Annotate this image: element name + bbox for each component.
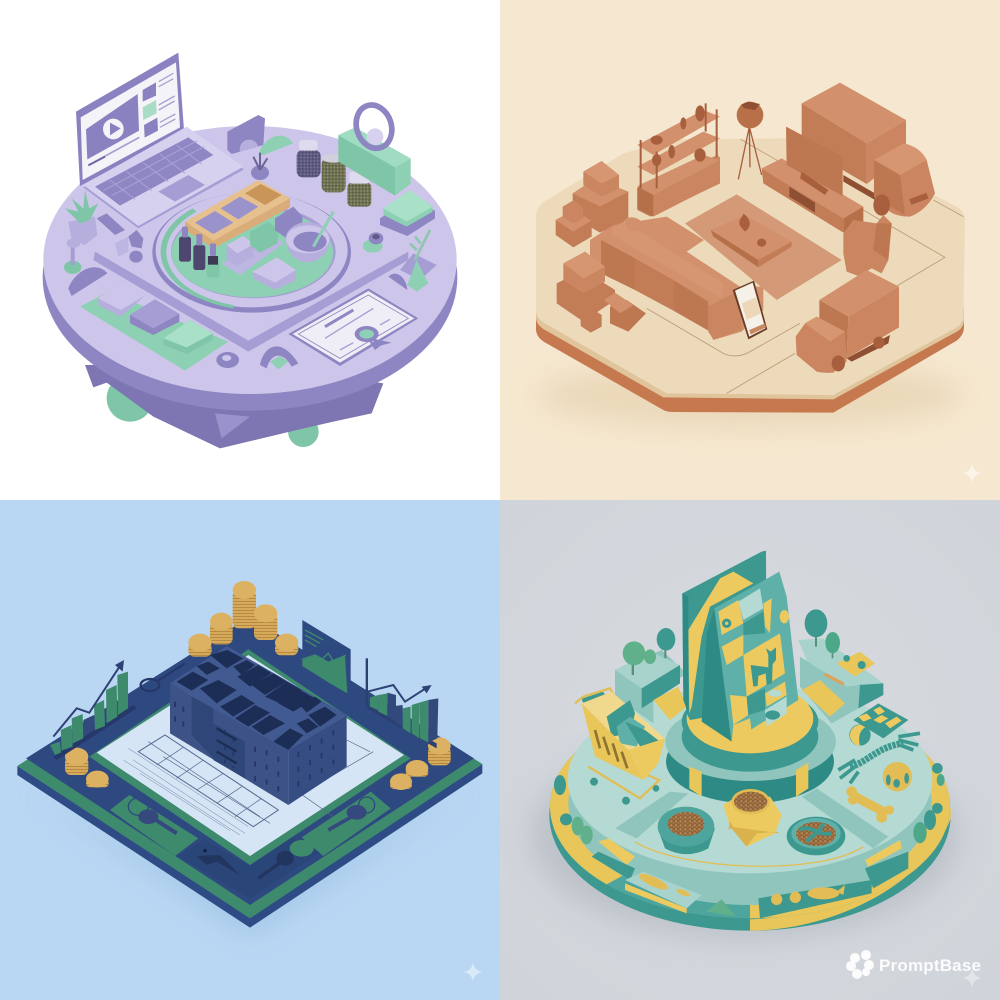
outer disc side xyxy=(549,699,951,931)
laptop xyxy=(76,53,244,228)
coin stacks xyxy=(65,581,451,790)
herb jars xyxy=(297,140,371,207)
inner green frame xyxy=(89,649,411,865)
ball toys xyxy=(849,724,912,791)
scene: pet food platform xyxy=(549,551,951,931)
navy lower tile with lock and key xyxy=(178,837,320,898)
board side xyxy=(17,764,482,928)
sparkle bottom right xyxy=(962,968,982,988)
bone xyxy=(846,786,894,823)
green tray with blocks xyxy=(80,280,228,371)
building xyxy=(170,646,347,805)
dropper bottles xyxy=(179,227,219,278)
green feet xyxy=(107,375,319,447)
potted lavender xyxy=(251,153,269,180)
outer disc top teal xyxy=(550,695,950,918)
watermark text: PromptBase xyxy=(879,956,981,975)
platform side xyxy=(536,313,964,413)
background: grey quadrant xyxy=(500,500,1000,1000)
big truck xyxy=(802,83,935,217)
left small shapes xyxy=(64,213,143,296)
platform top xyxy=(43,126,457,394)
backboard xyxy=(682,551,767,720)
teal bowl with kibble xyxy=(658,807,715,854)
rope toy xyxy=(838,733,920,783)
ground shadow: blueprint board xyxy=(30,790,470,935)
floor lamp xyxy=(737,102,763,179)
food bag xyxy=(702,572,798,742)
fish shelf xyxy=(758,880,872,918)
sparkle bottom left xyxy=(463,962,483,982)
floor lines xyxy=(647,139,963,393)
green block with ring xyxy=(338,100,411,196)
dividers xyxy=(615,788,888,848)
rug xyxy=(685,194,842,300)
green key tiles xyxy=(110,792,391,856)
shelf unit xyxy=(637,103,720,217)
key on green tile right xyxy=(328,797,375,830)
platform rim xyxy=(43,144,457,411)
blueprint rooms xyxy=(123,735,373,835)
soap blocks xyxy=(222,207,303,290)
dog icon on bag xyxy=(751,647,776,687)
right bar chart xyxy=(366,658,438,748)
scene: terracotta home delivery platform xyxy=(536,83,965,413)
ground shadow: pet platform xyxy=(530,730,960,940)
green tent xyxy=(706,899,736,917)
middle platform top xyxy=(568,685,932,873)
sparkle top right xyxy=(962,463,982,483)
background: blue quadrant xyxy=(0,500,500,1000)
central tray xyxy=(93,252,408,352)
platform rim xyxy=(536,307,964,399)
board navy frame xyxy=(26,617,474,905)
scene: real estate investment board xyxy=(17,581,482,928)
pyramid and plant xyxy=(388,230,437,292)
central pedestal xyxy=(665,683,836,803)
shopping cart xyxy=(575,688,665,805)
box stack left lower xyxy=(557,252,646,333)
middle platform side xyxy=(568,702,932,905)
armchair xyxy=(843,215,892,276)
box stack left upper xyxy=(556,161,628,247)
small green ring xyxy=(363,232,383,253)
blueprint sheet xyxy=(97,655,404,856)
mixing bowl xyxy=(286,212,333,262)
mat toy xyxy=(853,703,908,738)
scene: lavender course platform xyxy=(43,53,457,448)
potted plant xyxy=(65,190,98,245)
small disc and arch xyxy=(216,346,298,369)
outer yellow side strip xyxy=(750,807,951,931)
background: white quadrant xyxy=(0,0,500,500)
key on green tile left xyxy=(128,798,177,833)
back platforms xyxy=(615,638,883,723)
carrot shelf xyxy=(625,871,702,913)
coffee table xyxy=(711,213,792,267)
underside facet xyxy=(215,413,250,438)
outline key top left xyxy=(141,663,185,691)
ground shadow: terracotta platform xyxy=(535,360,965,430)
green half cylinder xyxy=(258,136,293,155)
board green layer xyxy=(17,617,482,918)
watermark logo xyxy=(846,950,874,979)
central ring xyxy=(152,193,351,313)
wooden soap mould xyxy=(185,180,290,248)
outer disc yellow right sector xyxy=(750,695,950,918)
trees xyxy=(554,609,945,844)
left bar chart xyxy=(50,660,137,760)
background: cream quadrant xyxy=(500,0,1000,500)
certificate xyxy=(288,288,418,366)
yellow raised bowl xyxy=(723,789,782,847)
camera block xyxy=(227,115,265,154)
yellow inlay line xyxy=(635,842,863,866)
platform top xyxy=(536,138,965,395)
small truck xyxy=(796,270,899,373)
platform underside xyxy=(85,363,383,448)
slow feeder bowl xyxy=(787,817,845,855)
TV unit xyxy=(762,127,863,233)
outer disc yellow left sector xyxy=(550,695,750,884)
sofa xyxy=(590,217,763,340)
yellow ledges xyxy=(592,838,908,888)
poster chart xyxy=(302,620,351,695)
stacked slab xyxy=(380,190,435,236)
phone xyxy=(733,281,767,339)
